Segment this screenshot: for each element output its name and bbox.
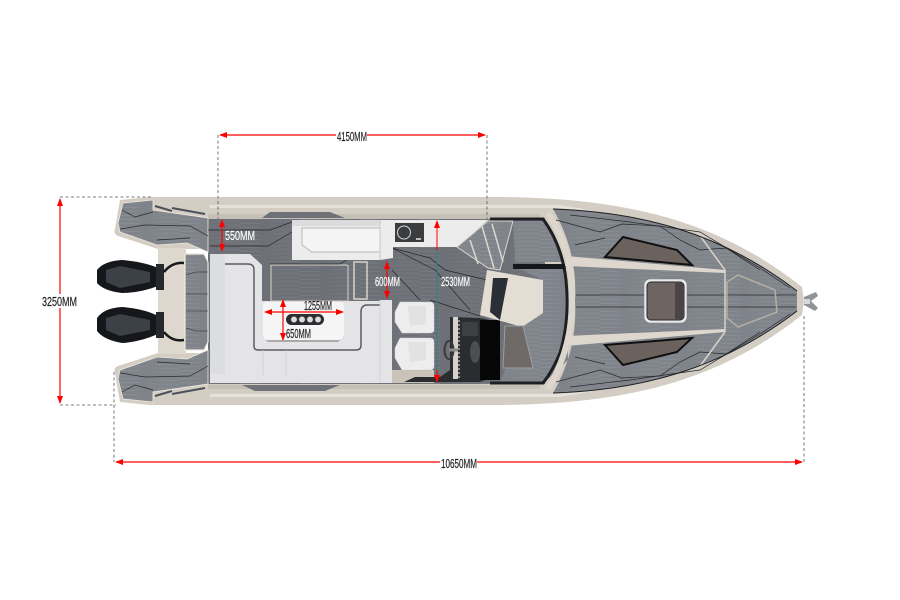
dimension: 550MM [222,220,255,251]
upper outboard engine [97,260,184,293]
upper window [605,237,692,265]
side walkway strips [208,212,540,391]
steps to cabin [457,221,513,270]
deck hatch [644,279,687,323]
hull outline [114,197,804,405]
lower stern pod deck [118,350,208,402]
foredeck center lines [576,295,796,307]
bow anchor cleat [803,292,818,311]
dimension: 1255MM [265,298,343,313]
cockpit and cabin deck [208,218,545,384]
lower helm seat [395,338,434,370]
table cup holders [286,314,324,325]
cream companionway console [480,270,543,327]
brown cabin window [503,326,533,368]
dimension: 650MM: 650MM [286,326,311,341]
lower outboard engine [97,307,184,343]
dimension: 2530MM: 2530MM [441,274,470,289]
cabin access deck [500,221,568,382]
swim platform teak [185,254,208,350]
lower window [605,338,692,365]
dimension: 4150MM [218,129,487,219]
aft L-shaped lounge [210,254,392,383]
dimension: 10650MM [114,316,804,471]
forward diamond panel [727,275,777,327]
steering wheel [444,341,458,359]
small teak step [354,262,367,299]
dimension: 600MM: 600MM [375,274,400,289]
dimension: 4150MM: 4150MM [337,129,367,144]
seat base trim [392,370,434,383]
deck seam lines [208,222,487,316]
bow rail edge [553,209,797,393]
lower cream bar [566,329,725,346]
foredeck [553,209,797,393]
dimension: 1255MM: 1255MM [304,298,332,313]
helm console [404,317,500,382]
upper cream bar [566,256,725,273]
dimension: 3250MM [42,197,152,405]
sink and cooktop [395,223,424,242]
upper stern pod deck [118,200,208,252]
cockpit table [263,302,344,342]
dimension: 550MM: 550MM [225,228,255,243]
dimension: 3250MM: 3250MM [42,294,77,309]
foredeck upper seam lines [556,215,790,288]
upper helm seat [395,302,434,333]
side deck highlights [210,205,600,397]
aft central teak panel [271,265,348,301]
vertical foredeck rail [698,233,725,369]
dimension: 650MM [283,300,311,341]
dimension: 10650MM: 10650MM [441,456,477,471]
foredeck lower seam lines [556,314,790,387]
windscreen frame [490,213,572,389]
dimension: 600MM [375,262,400,298]
transom platform [158,248,208,354]
galley unit [292,220,488,260]
